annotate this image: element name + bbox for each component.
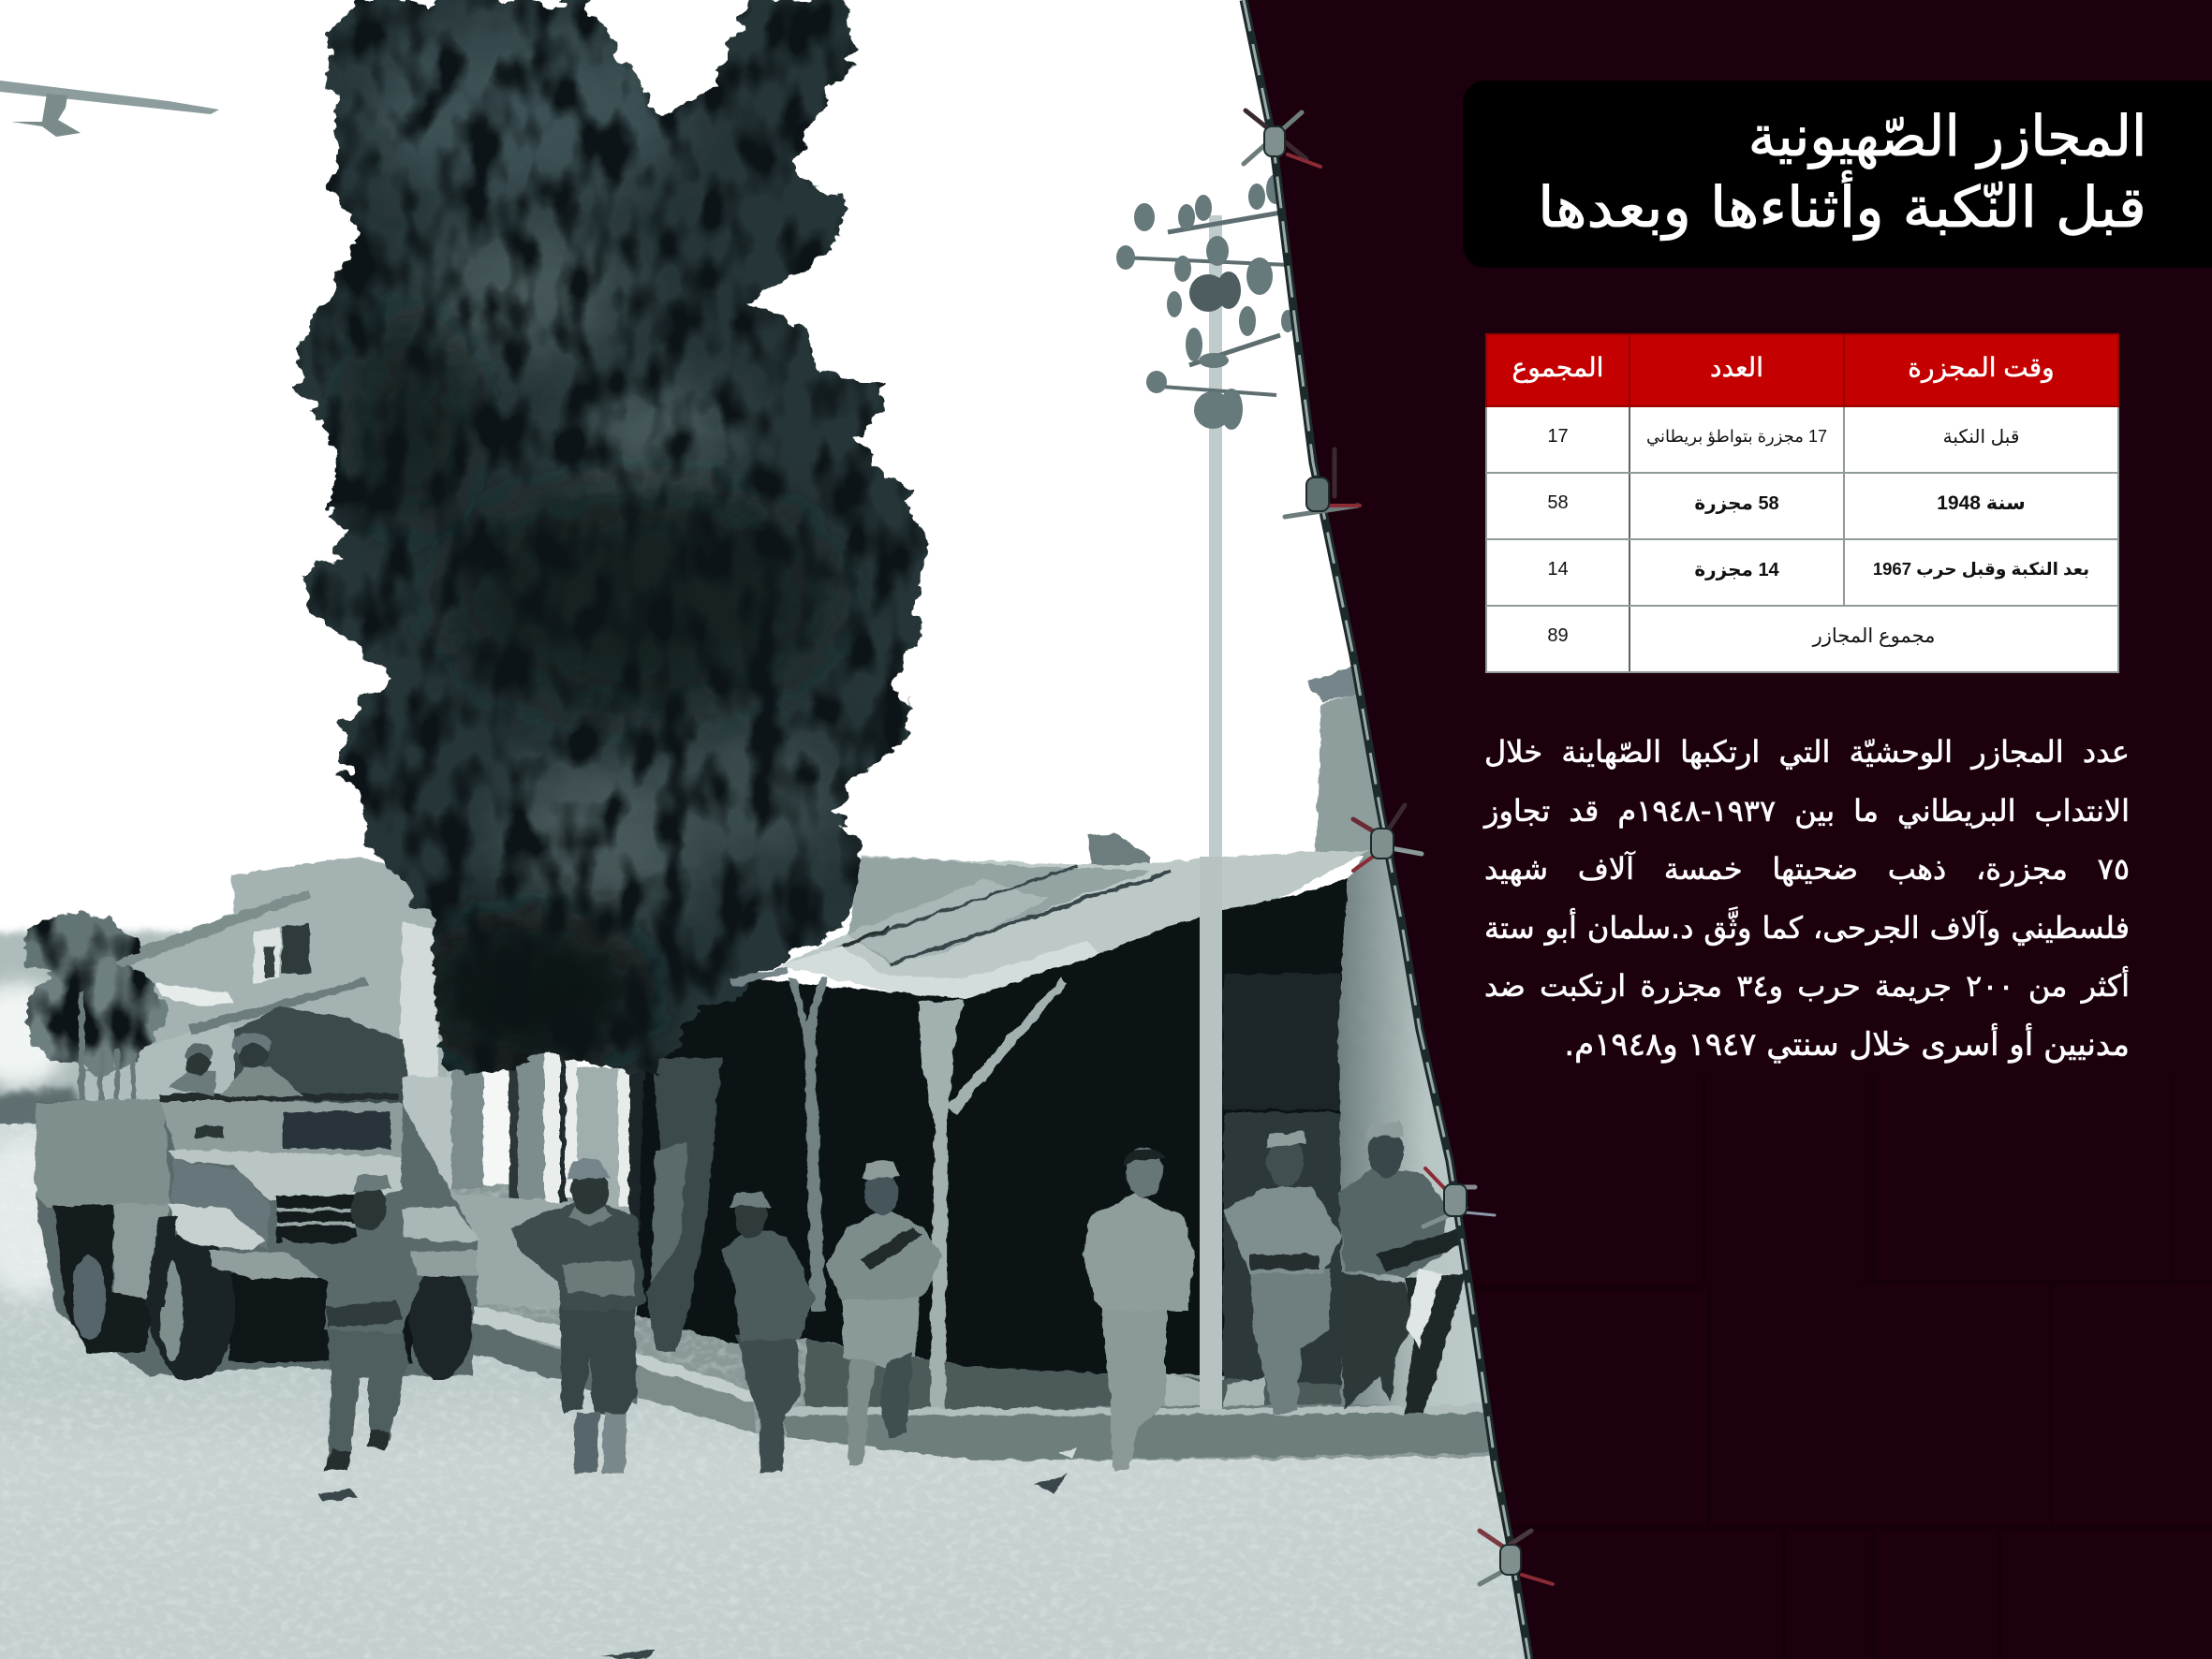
massacres table: 17 مجزرة بتواطؤ بريطاني: [1646, 427, 1827, 446]
roof supports: [789, 977, 1068, 1414]
massacres table: العدد: [1710, 352, 1763, 382]
wall tower: [1316, 695, 1386, 857]
bushes behind truck: [234, 1006, 412, 1105]
body paragraph: ٧٥ مجزرة، ذهب ضحيتها خمسة آلاف شهيد: [1484, 851, 2130, 887]
right fender: [402, 1208, 479, 1243]
tree foliage: [281, 0, 936, 1086]
massacres table: قبل النكبة: [1943, 427, 2019, 448]
road debris: [318, 1446, 1077, 1659]
ground: [0, 1123, 1573, 1659]
barb 2: [1285, 449, 1360, 517]
massacres table: 58: [1547, 492, 1569, 513]
bumper: [208, 1250, 478, 1279]
left fender: [169, 1204, 265, 1250]
shed floor and rags: [805, 1339, 1349, 1416]
soldier 4: [826, 1161, 943, 1465]
title panel: [1463, 81, 2212, 268]
soldier 7: [1338, 1122, 1466, 1414]
mid-ground behind curb: [450, 1110, 1490, 1462]
barb 5: [1480, 1531, 1553, 1584]
soldier 3: [721, 1191, 815, 1472]
photo scene: [0, 0, 1592, 1659]
massacres table: بعد النكبة وقبل حرب 1967: [1873, 559, 2089, 579]
massacres table: سنة 1948: [1937, 492, 2026, 513]
body paragraph: فلسطيني وآلاف الجرحى، كما وثَّق د.سلمان أبو ستة: [1484, 910, 2130, 946]
massacres table: مجموع المجازر: [1813, 625, 1935, 646]
airplane: [0, 81, 219, 137]
stone building: [84, 857, 450, 1123]
curbs: [473, 1305, 1498, 1461]
corrugated roof: [780, 849, 1370, 999]
faint stone wall: [1472, 1077, 2212, 1659]
tree trunk: [646, 1058, 721, 1353]
ground light patch at left: [0, 1135, 53, 1303]
massacres table: [1485, 333, 2119, 673]
massacres table: 17: [1547, 425, 1569, 446]
tower cap: [1306, 667, 1369, 702]
utility pole: [1116, 174, 1294, 1409]
under chassis: [229, 1273, 412, 1362]
right stucco wall: [1338, 849, 1592, 1461]
truck grill: [276, 1196, 356, 1242]
soldier 2: [510, 1159, 646, 1474]
soldier 5: [1082, 1147, 1195, 1472]
dark maroon panel: [1244, 0, 2212, 1659]
body paragraph: [1482, 734, 2130, 1064]
barb 4: [1423, 1168, 1495, 1226]
barb 1: [1244, 110, 1320, 167]
palm trunks: [79, 992, 136, 1105]
barb 3: [1353, 805, 1422, 871]
title line 1: المجازر الصّهيونية: [1747, 104, 2146, 169]
roof sandbag: [1086, 833, 1150, 871]
massacres table: 14: [1547, 558, 1569, 579]
shed upper back wall: [1223, 974, 1340, 1109]
crew in truck: [169, 1032, 304, 1097]
body paragraph: الانتداب البريطاني ما بين ١٩٣٧-١٩٤٨م قد تجاوز: [1484, 793, 2130, 829]
body paragraph: عدد المجازر الوحشيّة التي ارتكبها الصّهاينة خلال: [1484, 734, 2130, 770]
half-track truck: [36, 1032, 479, 1381]
massacres table: 89: [1547, 625, 1569, 646]
front-left wheel: [149, 1231, 235, 1381]
roof rail: [730, 970, 787, 983]
body paragraph: أكثر من ٢٠٠ جريمة حرب و٣٤ مجزرة ارتكبت ضد: [1484, 968, 2130, 1004]
title line 2: قبل النّكبة وأثناءها وبعدها: [1538, 175, 2146, 241]
massacres table: وقت المجزرة: [1908, 352, 2055, 382]
soldier 6: [1223, 1131, 1341, 1414]
massacres table: 14 مجزرة: [1694, 560, 1779, 580]
shed interior: [637, 879, 1348, 1381]
body paragraph: مدنيين أو أسرى خلال سنتي ١٩٤٧ و١٩٤٨م.: [1564, 1026, 2130, 1064]
soldier 1: [281, 1174, 420, 1472]
front-right wheel: [410, 1267, 472, 1379]
pillars behind tree: [403, 1049, 652, 1311]
massacres table: 58 مجزرة: [1694, 492, 1779, 513]
massacres table: المجموع: [1512, 352, 1603, 382]
palm trees: [19, 914, 164, 1070]
distant haze and hedge: [0, 925, 451, 1125]
rear track: [53, 1205, 155, 1353]
barbed wire: [1244, 0, 1553, 1659]
shed back door: [1223, 1112, 1345, 1393]
